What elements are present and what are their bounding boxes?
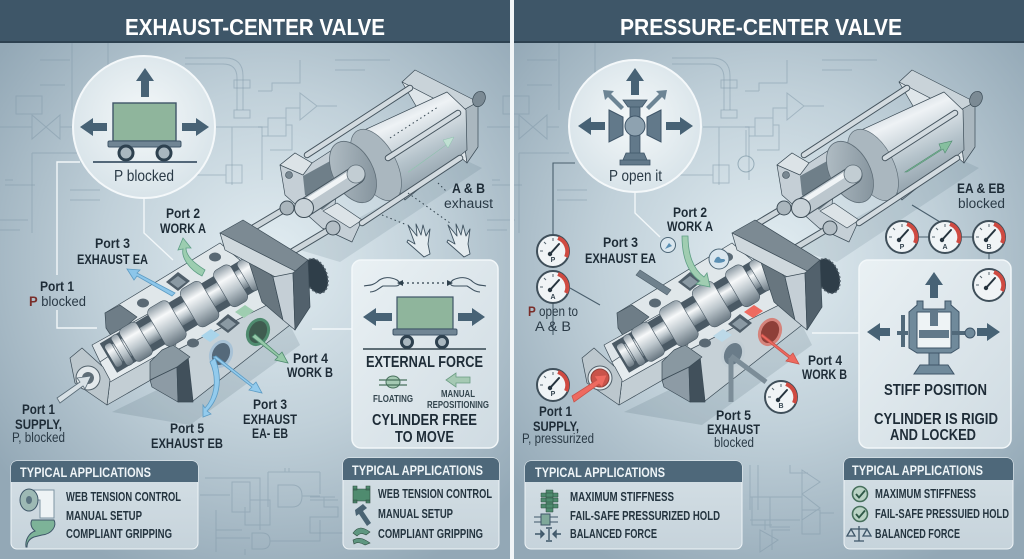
- callout circle: p blocked: [73, 56, 215, 198]
- label: port 1 supply: [522, 404, 594, 446]
- panel: typical applications right: COMPLIANT GRIPPING: [378, 527, 483, 541]
- gauge: b callout: [973, 269, 1005, 301]
- callout circle: p open it: [569, 60, 701, 192]
- panel: typical applications right: MAXIMUM STIFFNESS: [875, 487, 976, 501]
- panel: typical applications left: FAIL-SAFE PRESSURIZED HOLD: [570, 509, 720, 523]
- callout: stiff position: AND LOCKED: [890, 427, 976, 444]
- panel: typical applications left: [11, 461, 198, 549]
- label: ea and eb blocked: blocked: [958, 196, 1005, 211]
- panel: typical applications left: TYPICAL APPLICATIONS: [535, 465, 665, 480]
- label: port 4: WORK B: [287, 365, 333, 380]
- label: port 1 p blocked: [29, 279, 86, 309]
- label: port 1 supply: Port 1: [22, 402, 55, 417]
- icon: manual arrow: [446, 373, 470, 387]
- icon: vise with arrows: [867, 272, 1000, 374]
- gauge: p right: P: [900, 244, 905, 251]
- label: port 3 exhaust ea-eb: EA- EB: [252, 426, 288, 441]
- callout: external force: CYLINDER FREE: [372, 412, 477, 429]
- divider: [510, 0, 514, 559]
- icon: rollers: [353, 486, 370, 503]
- gauge: b right: [973, 221, 1005, 253]
- panel: exhaust-center valve: [0, 0, 510, 559]
- label: port 3 exhaust ea-eb: [243, 397, 298, 441]
- panel: typical applications left: WEB TENSION CONTROL: [66, 490, 181, 504]
- gauge: b lower: [765, 381, 797, 413]
- panel: pressure-center valve: [487, 0, 1024, 559]
- arrow: port 3 grey: [636, 270, 671, 295]
- gauge: b right: B: [986, 244, 992, 251]
- label: port 1 p blocked: Port 1: [40, 279, 74, 294]
- gauge: p lower: P: [551, 391, 556, 398]
- arrow: port 3 exhaust ea: [127, 269, 175, 296]
- label: port 4: WORK B: [802, 367, 847, 382]
- panel: typical applications right: [343, 458, 499, 549]
- cylinder: [248, 70, 488, 262]
- icon: cart: [363, 297, 486, 349]
- label: a and b exhaust: exhaust: [444, 196, 493, 211]
- callout: external force: FLOATING: [373, 393, 413, 405]
- label: port 4: [802, 353, 847, 382]
- panel: typical applications right: TYPICAL APPLICATIONS: [852, 463, 983, 478]
- label: port 4: Port 4: [808, 353, 842, 368]
- gauge: p upper: [537, 235, 569, 267]
- gauge: a left: [537, 271, 569, 303]
- label: port 5: Port 5: [716, 408, 751, 423]
- label: port 1 supply: SUPPLY,: [533, 419, 579, 434]
- arrow: port 1 supply: [57, 376, 91, 403]
- header: exhaust-center: EXHAUST-CENTER VALVE: [125, 14, 385, 40]
- callout: external force: EXTERNAL FORCE: [366, 354, 483, 371]
- label: port 3 exhaust ea-eb: Port 3: [253, 397, 287, 412]
- panel: typical applications right: MANUAL SETUP: [378, 507, 453, 521]
- gauge: p right: [886, 221, 918, 253]
- low circuit right: [750, 465, 834, 552]
- label: p open to a and b: A & B: [535, 319, 571, 334]
- label: port 1 supply: [12, 402, 65, 445]
- callout: stiff position: [859, 260, 1011, 448]
- panel: typical applications left: TYPICAL APPLICATIONS: [20, 465, 151, 480]
- icon: floating: [379, 376, 407, 388]
- label: port 2: [667, 205, 713, 234]
- label: port 3: Port 3: [95, 236, 130, 251]
- label: port 2: [160, 206, 206, 236]
- label: port 4: [287, 351, 333, 380]
- label: port 5: Port 5: [170, 421, 204, 436]
- arrow: port 1 red: [572, 375, 607, 402]
- callout: external force: TO MOVE: [395, 429, 454, 446]
- callout: stiff position: CYLINDER IS RIGID: [874, 411, 998, 428]
- arrow: port 3 lower: [213, 356, 262, 393]
- icon: check 2: [852, 506, 868, 522]
- gauge: p lower: [537, 369, 569, 401]
- gauge: p upper: P: [551, 257, 556, 264]
- label: port 3: [585, 235, 656, 266]
- label: port 5: EXHAUST EB: [151, 436, 223, 451]
- label: port 1 supply: Port 1: [539, 404, 572, 419]
- label: a and b exhaust: [444, 181, 493, 211]
- header: pressure-center: PRESSURE-CENTER VALVE: [620, 14, 902, 40]
- icon: pressure center symbol: [578, 68, 693, 165]
- icon: hammer: [355, 504, 371, 526]
- label: a and b exhaust: A & B: [452, 181, 485, 196]
- icon: scales: [847, 526, 871, 541]
- callout: external force: REPOSITIONING: [427, 399, 489, 411]
- callout: external force: [352, 260, 498, 448]
- arrow: port 5: [203, 358, 219, 417]
- gauge: a left: A: [550, 294, 556, 301]
- label: p open to a and b: P open to: [528, 304, 578, 319]
- label: port 1 supply: SUPPLY,: [15, 417, 62, 432]
- panel: typical applications left: MANUAL SETUP: [66, 509, 142, 523]
- icon: flow bubbles: [660, 238, 729, 269]
- label: port 5: blocked: [714, 435, 754, 450]
- label: port 5: EXHAUST: [707, 422, 761, 437]
- icon: hands and dotted arrow: [364, 278, 486, 292]
- callout circle: p blocked: P blocked: [114, 168, 174, 185]
- label: port 1 supply: P, blocked: [12, 430, 65, 445]
- icon: hold block: [534, 514, 558, 525]
- label: port 2: Port 2: [673, 205, 707, 220]
- label: port 4: Port 4: [293, 351, 328, 366]
- gauge: b lower: B: [778, 403, 784, 410]
- label: ea and eb blocked: EA & EB: [957, 181, 1005, 196]
- label: ea and eb blocked: [957, 181, 1005, 211]
- header: exhaust-center: [0, 0, 510, 43]
- label: p open to a and b: [528, 304, 578, 334]
- valve body: [582, 220, 844, 425]
- icon: gripper: [353, 528, 370, 545]
- label: port 3: Port 3: [603, 235, 638, 250]
- label: port 5: [707, 408, 761, 450]
- gauge: a right: [929, 221, 961, 253]
- panel: typical applications right: [844, 458, 1013, 549]
- label: port 2: Port 2: [166, 206, 200, 221]
- label: port 1 supply: P, pressurized: [522, 431, 594, 446]
- icon: balanced force: [535, 528, 561, 541]
- callout circle: p open it: P open it: [609, 168, 662, 185]
- label: port 3: [77, 236, 148, 267]
- cart icon: [80, 68, 209, 162]
- label: port 1 p blocked: P blocked: [29, 294, 86, 309]
- gauge: a right: A: [942, 244, 948, 251]
- callout: external force: MANUAL: [441, 388, 475, 400]
- arrow: port 4 work b: [252, 334, 288, 363]
- label: port 3: EXHAUST EA: [585, 251, 656, 266]
- callout: stiff position: STIFF POSITION: [884, 382, 987, 399]
- arrow: port 2 green: [682, 236, 710, 287]
- panel: typical applications left: BALANCED FORCE: [570, 527, 657, 541]
- panel: typical applications right: BALANCED FORCE: [875, 527, 960, 541]
- panel: typical applications left: COMPLIANT GRIPPING: [66, 527, 172, 541]
- label: port 2: WORK A: [160, 221, 206, 236]
- panel: typical applications right: TYPICAL APPLICATIONS: [352, 463, 483, 478]
- panel: typical applications left: MAXIMUM STIFFNESS: [570, 490, 674, 504]
- icon: check 1: [852, 486, 868, 502]
- arrow: port 2 work a: [178, 238, 205, 276]
- valve body: [70, 220, 332, 425]
- label: port 3: EXHAUST EA: [77, 252, 148, 267]
- panel: typical applications left: [525, 461, 742, 549]
- panel: typical applications right: WEB TENSION CONTROL: [378, 487, 492, 501]
- label: port 2: WORK A: [667, 219, 713, 234]
- icon: stiffness spindle: [541, 490, 558, 512]
- icon: web roll and gripper: [20, 489, 55, 547]
- arrow: port 4 red: [761, 334, 799, 364]
- label: port 5: [151, 421, 223, 451]
- arrow: port 5 grey lines: [731, 356, 766, 402]
- cylinder: [745, 70, 985, 262]
- label: port 3 exhaust ea-eb: EXHAUST: [243, 412, 298, 427]
- header: pressure-center: [514, 0, 1024, 43]
